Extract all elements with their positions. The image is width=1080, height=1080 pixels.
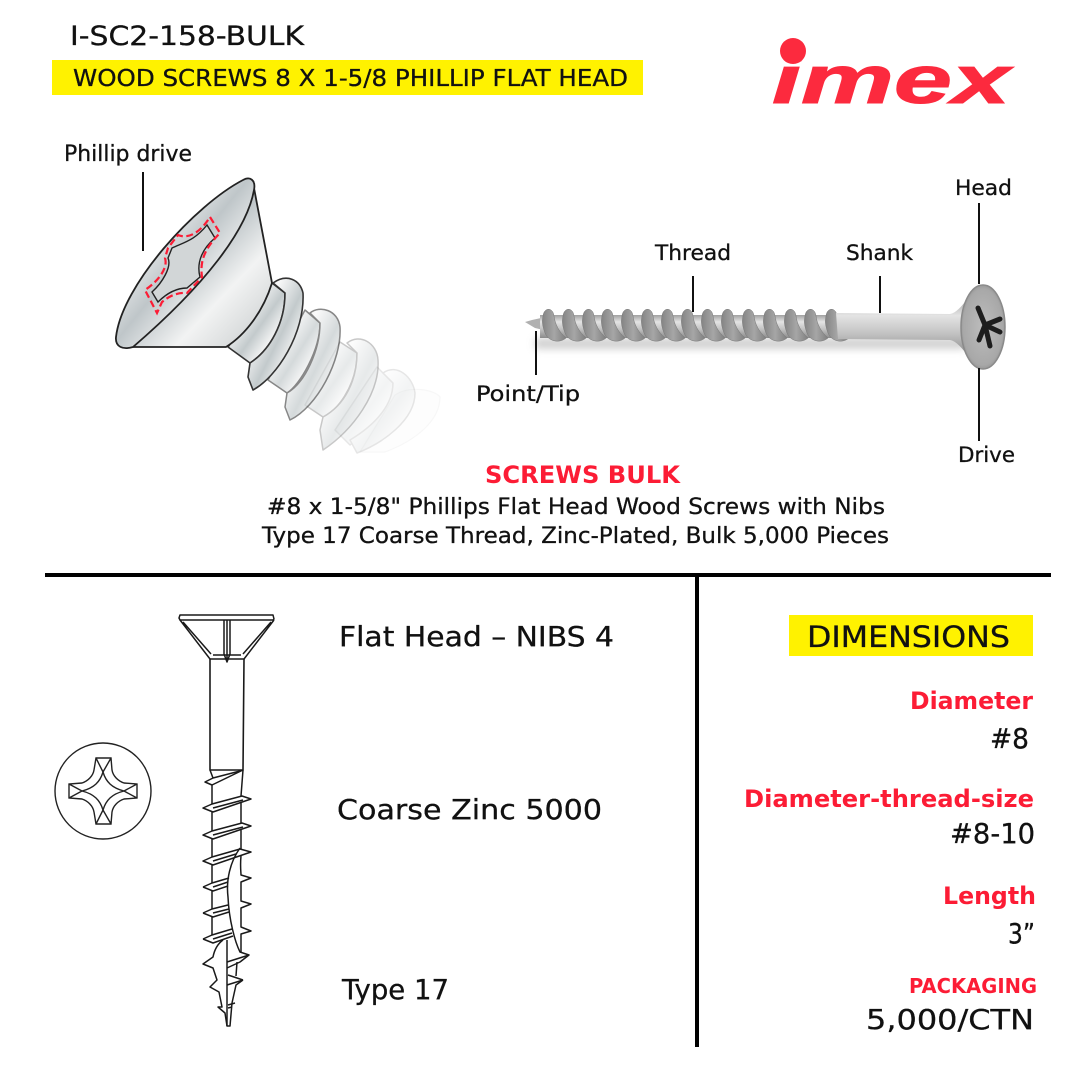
cone of head xyxy=(120,188,272,347)
threaded core xyxy=(540,315,840,338)
spec: diameter: #8 xyxy=(990,722,1029,755)
threads xyxy=(542,309,849,341)
label: Head with leader: Head xyxy=(955,176,1012,200)
icon: phillips recess front view xyxy=(55,743,151,839)
spec: packaging xyxy=(866,974,1037,1036)
spec: diameter xyxy=(910,687,1033,755)
spec: diameter-thread-size xyxy=(744,785,1035,850)
label: Thread with leader: Thread xyxy=(654,241,731,265)
head face xyxy=(116,178,254,348)
feature label: head and nibs: Flat Head – NIBS 4 xyxy=(339,620,614,653)
spec: length: 3” xyxy=(1008,917,1035,950)
spec: length: Length xyxy=(943,882,1036,910)
shadow xyxy=(535,338,965,349)
illustration: photo of wood screw xyxy=(525,285,1005,369)
label: Point/Tip with leader: Point/Tip xyxy=(476,382,580,406)
illustration: flat head screw close-up xyxy=(116,178,440,453)
description block xyxy=(261,461,889,549)
spec: diameter-thread-size: Diameter-thread-size xyxy=(744,785,1034,813)
description block: #8 x 1-5/8" Phillips Flat Head Wood Screws with Nibs xyxy=(267,495,885,520)
screw head with cross xyxy=(961,285,1005,369)
shank xyxy=(210,659,244,770)
label: Shank with leader: Shank xyxy=(846,241,914,265)
smooth shank xyxy=(836,298,968,356)
label: Shank with leader xyxy=(846,241,914,313)
fading thread segments xyxy=(228,278,440,453)
spec: diameter-thread-size: #8-10 xyxy=(950,817,1035,850)
tip xyxy=(525,316,552,332)
label: Drive with leader xyxy=(958,368,1015,467)
imex logo: imex xyxy=(772,42,1015,118)
imex logo xyxy=(772,38,1015,118)
red dashed outline xyxy=(145,217,220,313)
highlighted product title: WOOD SCREWS 8 X 1-5/8 PHILLIP FLAT HEAD xyxy=(73,66,628,92)
illustration: screw line drawing xyxy=(179,615,274,1026)
spec: length xyxy=(943,882,1036,950)
product code heading: I-SC2-158-BULK xyxy=(70,21,305,52)
feature label: thread, finish, quantity: Coarse Zinc 5000 xyxy=(337,793,602,826)
drive recess xyxy=(152,225,215,302)
feature label: type: Type 17 xyxy=(341,973,449,1006)
spec: packaging: PACKAGING xyxy=(909,974,1037,998)
label: Phillip drive with leader xyxy=(64,142,192,251)
label: Point/Tip with leader xyxy=(476,331,580,406)
dimensions heading: DIMENSIONS xyxy=(807,620,1010,654)
label: Thread with leader xyxy=(654,241,731,312)
dimensions heading xyxy=(789,615,1033,656)
highlighted product title xyxy=(52,60,643,95)
label: Head with leader xyxy=(955,176,1012,284)
label: Drive with leader: Drive xyxy=(958,443,1015,467)
spec: diameter: Diameter xyxy=(910,687,1033,715)
head xyxy=(179,615,274,662)
description block: Type 17 Coarse Thread, Zinc-Plated, Bulk 5,000 Pieces xyxy=(261,524,889,549)
description block: SCREWS BULK xyxy=(485,461,681,489)
label: Phillip drive with leader: Phillip drive xyxy=(64,142,192,167)
threads xyxy=(203,770,251,1026)
spec: packaging: 5,000/CTN xyxy=(866,1003,1034,1036)
